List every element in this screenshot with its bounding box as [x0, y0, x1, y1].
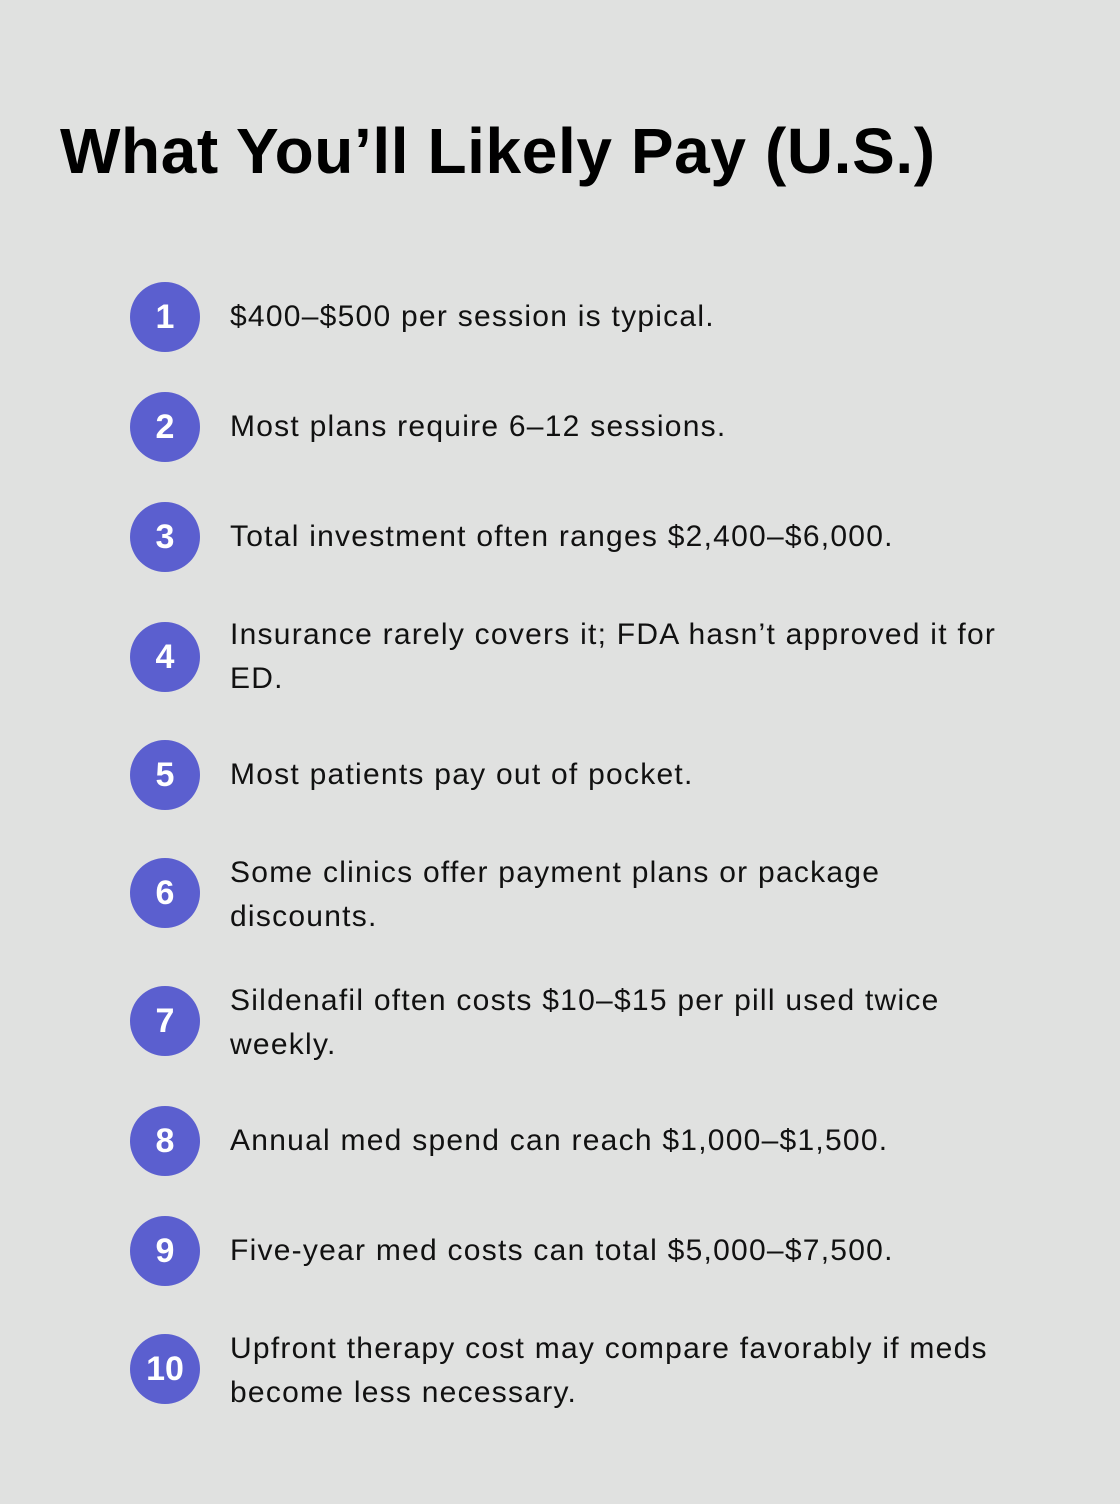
item 5: 5 [156, 756, 174, 794]
item 1 [130, 282, 715, 352]
item 4 [130, 618, 996, 695]
item 8 [130, 1106, 888, 1176]
item 3: Total investment often ranges $2,400–$6,000. [230, 520, 894, 553]
item 10 [130, 1332, 988, 1409]
item 7: 7 [156, 1002, 174, 1040]
item 2: 2 [156, 408, 174, 446]
item 1: 1 [156, 298, 174, 336]
title: What You’ll Likely Pay (U.S.) [60, 115, 936, 187]
item 7: Sildenafil often costs $10–$15 per pill used twice [230, 984, 940, 1017]
item 10: Upfront therapy cost may compare favorably if meds [230, 1332, 988, 1365]
item 10: become less necessary. [230, 1376, 577, 1409]
item 3: 3 [156, 518, 174, 556]
item 7 [130, 984, 940, 1061]
item 4: 4 [156, 638, 174, 676]
item 4: Insurance rarely covers it; FDA hasn’t approved it for [230, 618, 996, 651]
item 2 [130, 392, 726, 462]
item 5: Most patients pay out of pocket. [230, 758, 694, 791]
item 8: Annual med spend can reach $1,000–$1,500. [230, 1124, 888, 1157]
item 3 [130, 502, 894, 572]
item 10: 10 [146, 1350, 184, 1388]
item 8: 8 [156, 1122, 174, 1160]
item 4: ED. [230, 662, 284, 695]
item 9: 9 [156, 1232, 174, 1270]
item 7: weekly. [230, 1028, 337, 1061]
item 6: 6 [156, 874, 174, 912]
item 6 [130, 856, 880, 933]
item 9 [130, 1216, 894, 1286]
item 1: $400–$500 per session is typical. [230, 300, 715, 333]
item 9: Five-year med costs can total $5,000–$7,500. [230, 1234, 894, 1267]
item 2: Most plans require 6–12 sessions. [230, 410, 726, 443]
item 5 [130, 740, 694, 810]
item 6: discounts. [230, 900, 378, 933]
item 6: Some clinics offer payment plans or package [230, 856, 880, 889]
